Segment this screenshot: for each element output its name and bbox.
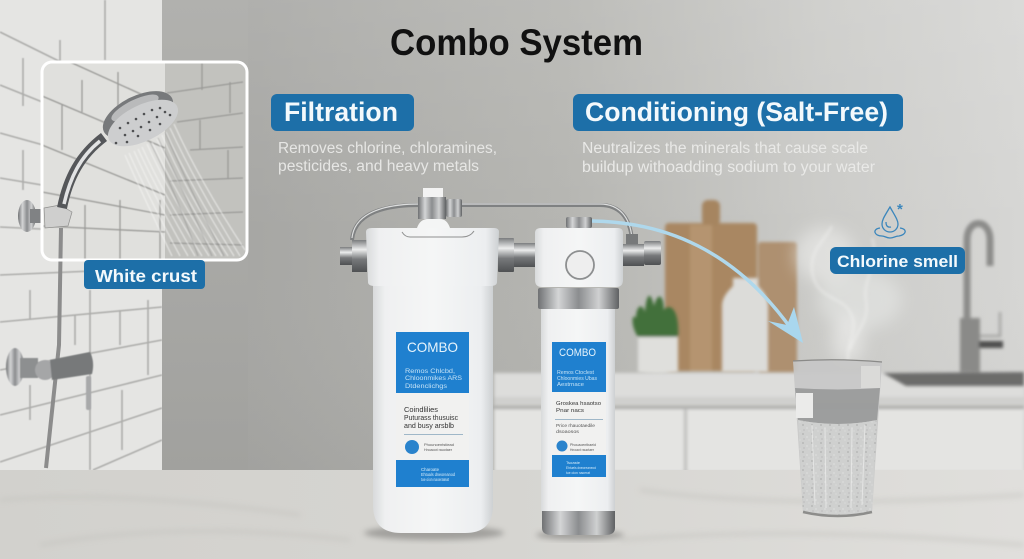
small filter top nut	[566, 217, 592, 228]
big filter: Coindlilies	[404, 407, 439, 414]
small filter: Pnar nacs	[556, 408, 584, 414]
hose	[46, 228, 61, 468]
inset wall tiles	[42, 62, 247, 260]
connecting pipe	[352, 204, 632, 240]
big filter: Charoate	[421, 467, 439, 472]
arrow: water flow to glass	[592, 221, 803, 343]
shadowed side wall	[162, 0, 248, 470]
icon: chlorine drop: *	[897, 201, 903, 218]
icon: chlorine drop	[875, 201, 905, 238]
small filter: dsoaosos	[556, 429, 580, 434]
big label top	[396, 332, 469, 393]
steam	[795, 226, 902, 364]
big filter cap slot	[402, 231, 474, 237]
small filter steel band	[538, 288, 619, 309]
shower inset frame	[18, 62, 247, 468]
big filter: Ehtuals dneoreanod	[421, 472, 455, 477]
big filter: Dtdenclichgs	[405, 384, 447, 390]
kitchen faucet and sink	[883, 224, 1024, 386]
chlorine smell tag: Chlorine smell	[837, 253, 958, 271]
middle fitting	[498, 238, 536, 272]
conditioning description: Neutralizes the minerals that cause scale	[582, 140, 868, 157]
small filter: Chloonmies Ubas	[557, 376, 598, 382]
small filter	[535, 217, 623, 535]
small filter: Groskea hsaotso	[556, 401, 601, 407]
small filter shadow	[536, 530, 624, 540]
big filter cap dome	[417, 219, 450, 228]
top fitting	[418, 188, 462, 219]
white crust tag	[84, 260, 205, 289]
small label middle	[552, 392, 606, 455]
big filter: Remos Chlcbd,	[405, 369, 455, 375]
title: Combo System	[390, 22, 643, 63]
small filter: Tsoaste	[566, 460, 581, 465]
small label bottom	[552, 455, 606, 477]
small filter steel base	[542, 505, 615, 535]
filtration heading	[271, 94, 414, 131]
small filter: Price rhauotaedile	[556, 423, 596, 428]
shower handle	[62, 137, 104, 208]
filtration description: Removes chlorine, chloramines,	[278, 140, 497, 157]
small filter: Ehtuels dneoreaneod	[566, 465, 596, 470]
cutting boards	[665, 200, 797, 372]
big filter: Phounoentstiead	[424, 442, 454, 447]
big filter shadow	[364, 526, 504, 540]
small filter: Hnoaot rauotaer	[570, 447, 595, 452]
right fitting	[622, 234, 661, 266]
potted plant	[632, 296, 678, 374]
small filter body	[541, 305, 615, 511]
shower mixer valve	[6, 348, 93, 410]
filtration heading: Filtration	[284, 97, 398, 127]
big filter cap	[366, 228, 499, 286]
small filter: COMBO	[559, 347, 596, 359]
big filter body	[373, 285, 493, 533]
glass of water	[793, 360, 882, 516]
inset white border	[42, 62, 247, 260]
big filter: tue oion naoerateat	[421, 477, 450, 482]
small filter: Phouaoentbaeid	[570, 442, 596, 447]
small filter: tue oion naoerat	[566, 470, 591, 475]
big filter: Puturass thusuisc	[404, 415, 458, 422]
white crust tag: White crust	[95, 266, 197, 286]
small filter: Remos Ctoclest	[557, 370, 595, 376]
left tiled wall	[0, 0, 162, 470]
small filter cap	[535, 228, 623, 287]
big filter: and busy arsblb	[404, 423, 454, 430]
water spray	[125, 124, 245, 256]
small filter dial	[566, 251, 594, 279]
big label bottom	[396, 460, 469, 487]
big filter: Chloonmikes ARS	[405, 376, 462, 382]
blurred kitchen background	[494, 200, 1024, 472]
filtration description: pesticides, and heavy metals	[278, 158, 479, 175]
chlorine smell tag	[830, 247, 965, 274]
big filter	[366, 219, 499, 533]
big filter: COMBO	[407, 339, 458, 355]
left fitting	[340, 240, 367, 272]
shower head	[96, 81, 185, 156]
countertop	[0, 470, 1024, 559]
big filter: Hnoaoot rauotaer	[424, 447, 453, 452]
conditioning description: buildup withoadding sodium to your water	[582, 159, 875, 176]
wall bracket	[18, 200, 72, 232]
big label middle	[396, 393, 469, 460]
small label top	[552, 342, 606, 392]
conditioning description	[582, 140, 875, 176]
filtration description	[278, 140, 497, 175]
back counter and cabinets	[494, 373, 1024, 472]
small filter: Aestrnace	[557, 382, 584, 388]
conditioning heading: Conditioning (Salt-Free)	[585, 97, 888, 127]
white bottle	[722, 278, 768, 372]
